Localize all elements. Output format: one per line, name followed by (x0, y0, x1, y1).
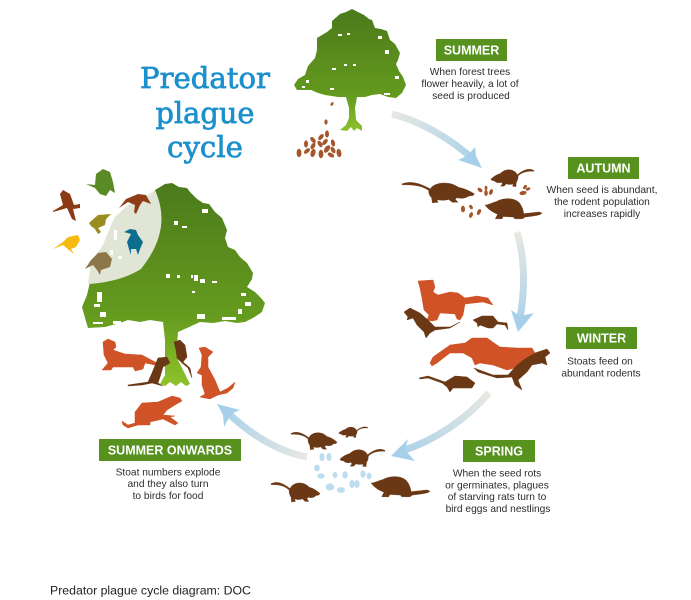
label: winter (561, 327, 641, 380)
icon: stoats chasing rodents (404, 280, 550, 392)
label: summer onwards: and they also turn (128, 479, 208, 490)
label: spring (445, 440, 550, 515)
label: autumn: When seed is abundant, (546, 185, 658, 196)
label: summer: When forest trees (430, 67, 510, 78)
title (140, 61, 270, 164)
label: spring: When the seed rots (453, 468, 541, 480)
bird: red parrot (53, 190, 80, 221)
label: winter: WINTER (577, 332, 626, 346)
label: autumn: AUTUMN (576, 162, 631, 176)
arrow: summer to autumn (392, 114, 482, 168)
label: spring: bird eggs and nestlings (446, 504, 550, 515)
arrow: winter to spring (391, 393, 489, 461)
bird: brown diving (119, 194, 151, 214)
label: autumn: the rodent population (554, 197, 650, 208)
bird: yellow (53, 235, 80, 254)
icon: large tree with birds and stoats (53, 169, 265, 428)
icon: starving rats and rotting seed (271, 427, 430, 502)
icon: flowering tree with seeds (294, 9, 406, 159)
label: summer: seed is produced (432, 91, 510, 102)
label: summer onwards (99, 439, 241, 502)
bird: green (86, 169, 115, 196)
arrow: autumn to winter (511, 232, 534, 332)
label: summer onwards: SUMMER ONWARDS (108, 444, 232, 458)
label: autumn: increases rapidly (564, 209, 641, 220)
stoat: left of trunk (102, 339, 157, 371)
pale disc over canopy (88, 190, 161, 284)
label: summer onwards: Stoat numbers explode (116, 468, 221, 478)
label: winter: Stoats feed on (567, 356, 633, 368)
label: summer onwards: to birds for food (133, 491, 204, 502)
label: winter: abundant rodents (561, 368, 641, 380)
title: cycle (167, 130, 243, 164)
title: Predator (140, 61, 270, 95)
bird: kiwi (85, 252, 112, 275)
title: plague (156, 96, 254, 130)
label: summer (421, 39, 519, 102)
stoat: crouching (122, 396, 182, 428)
caption: Predator plague cycle diagram: DOC (50, 584, 251, 598)
label: spring: SPRING (475, 444, 523, 458)
label: autumn (546, 157, 658, 220)
bird: olive (89, 214, 111, 234)
stoat: standing (197, 347, 235, 399)
rat: climbing trunk left (128, 357, 170, 386)
bird: blue (124, 229, 143, 255)
label: spring: or germinates, plagues (445, 480, 549, 492)
icon: rodents eating seed (402, 169, 542, 219)
label: summer: flower heavily, a lot of (421, 79, 519, 90)
arrow: spring to summer onwards (217, 404, 307, 457)
label: spring: of starving rats turn to (448, 492, 547, 503)
label: summer: SUMMER (444, 44, 499, 58)
rat: climbing trunk right (174, 340, 192, 378)
